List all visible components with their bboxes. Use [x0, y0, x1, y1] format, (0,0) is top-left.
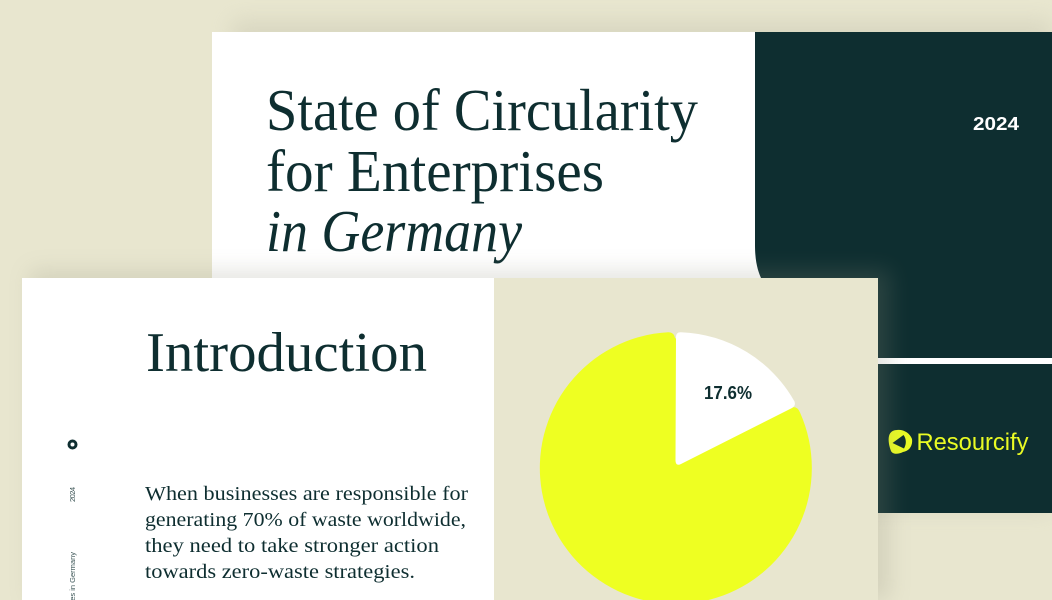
- cover title: for Enterprises: [266, 138, 604, 204]
- icon: small logo mark: [69, 441, 76, 448]
- year label: 2024: [973, 114, 1019, 134]
- panel: dark cover block: [755, 32, 1052, 358]
- heading: Introduction: Introduction: [146, 322, 427, 384]
- side year: 2024: [68, 487, 77, 502]
- cover title: in Germany: [266, 198, 523, 264]
- pie chart: [540, 332, 812, 600]
- side rail: [68, 441, 77, 600]
- wordmark: Resourcify: [916, 429, 1029, 456]
- panel: report cover: [212, 20, 1052, 513]
- icon: logo mark: [889, 430, 912, 454]
- intro paragraph: they need to take stronger action: [145, 535, 439, 557]
- cover title: [266, 77, 698, 264]
- intro paragraph: [145, 483, 468, 583]
- pie slice: 17.6%: [676, 332, 795, 465]
- logo: Resourcify: [889, 429, 1029, 456]
- panel: logo block: [860, 364, 1052, 513]
- intro paragraph: generating 70% of waste worldwide,: [145, 509, 466, 531]
- panel: introduction page: [22, 270, 890, 600]
- intro paragraph: towards zero-waste strategies.: [145, 561, 415, 583]
- pie value: 17.6%: [704, 383, 752, 403]
- cover title: State of Circularity: [266, 77, 698, 143]
- intro paragraph: When businesses are responsible for: [145, 483, 468, 505]
- pie slice: remainder: [540, 332, 812, 600]
